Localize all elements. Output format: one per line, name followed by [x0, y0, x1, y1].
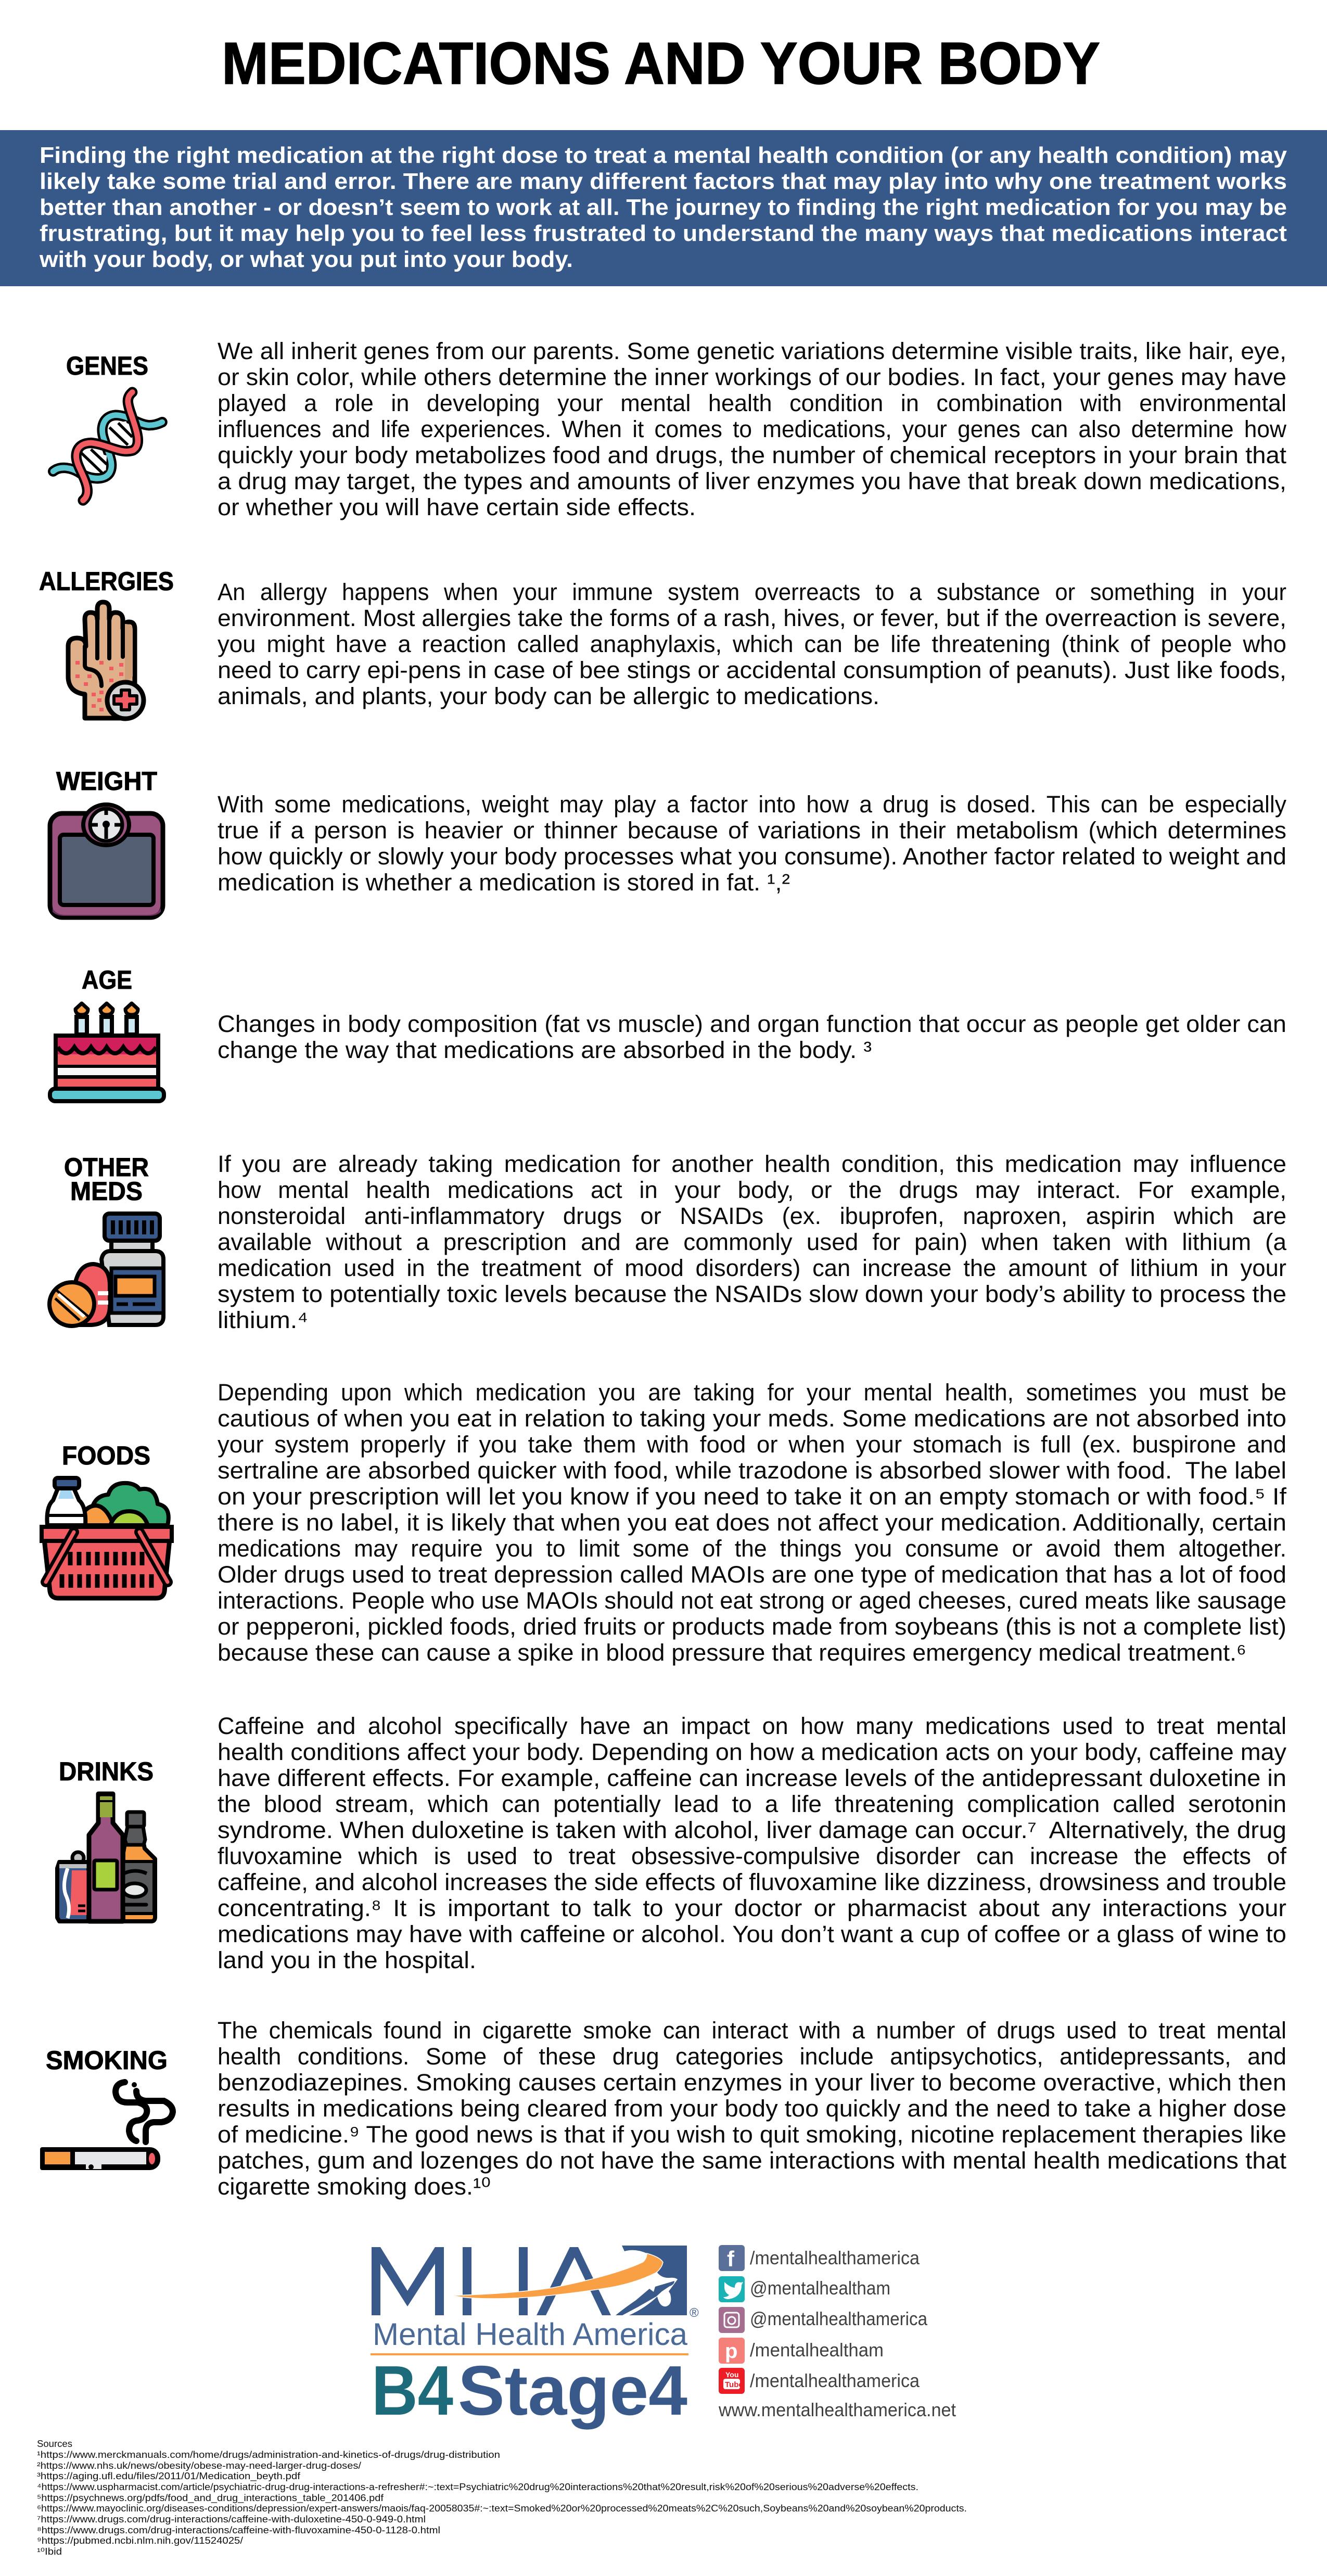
intro text: likely take some trial and error. There are many different factors that may play into why one treatment works: [40, 169, 1287, 194]
text: allergies: animals, and plants, your body can be allergic to medications.: [218, 683, 879, 709]
sources: Sources: [37, 2439, 72, 2449]
icon: bathroom scale: [50, 805, 163, 917]
icon: pill bottle and pills: [49, 1214, 163, 1326]
text: genes: played a role in developing your mental health condition in combination with environmental: [218, 390, 1286, 416]
text: genes: [218, 338, 1287, 520]
icon: instagram: [719, 2307, 745, 2333]
social handles: /mentalhealthamerica: [750, 2247, 920, 2268]
panel: foods: [42, 1379, 1287, 1666]
text: allergies: An allergy happens when your immune system overreacts to a substance or something in your: [218, 579, 1286, 605]
intro text: Finding the right medication at the right dose to treat a mental health condition (or any health condition) may: [40, 143, 1287, 168]
title: MEDICATIONS AND YOUR BODY: [222, 31, 1100, 97]
sources: ³https://aging.ufl.edu/files/2011/01/Medication_beyth.pdf: [37, 2471, 301, 2482]
social handles: /mentalhealtham: [750, 2339, 884, 2361]
icon: cigarette: [40, 2082, 173, 2170]
text: foods: cautious of when you eat in relation to taking your meds. Some medications are not absorbed into: [218, 1405, 1286, 1432]
panel: smoking: [40, 2017, 1287, 2200]
text: foods: medications may require you to limit some of the things you consume or avoid them altogether.: [218, 1535, 1286, 1562]
panel: other meds: [49, 1151, 1287, 1333]
intro text: [39, 143, 1287, 272]
icon: youtube: You: [725, 2370, 738, 2379]
intro text: better than another - or doesn’t seem to work at all. The journey to finding the right medication for you may be: [40, 195, 1287, 220]
text: allergies: need to carry epi-pens in case of bee stings or accidental consumption of peanuts). Just like foods,: [218, 657, 1286, 683]
panel: genes: [53, 338, 1287, 520]
social handles: @mentalhealtham: [750, 2277, 890, 2299]
logo: MHA B4Stage4: ®: [690, 2306, 699, 2320]
text: foods: [218, 1379, 1287, 1666]
text: weight: how quickly or slowly your body processes what you consume). Another factor related to weight and: [218, 843, 1286, 870]
text: genes: influences and life experiences. When it comes to medications, your genes can also determine how: [218, 416, 1286, 442]
text: allergies: [218, 579, 1286, 709]
text: other meds: system to potentially toxic levels because the NSAIDs slow down your body’s ability to process the: [218, 1281, 1286, 1307]
text: drinks: health conditions affect your body. Depending on how a medication acts on your body, caffeine may: [218, 1739, 1287, 1765]
text: smoking: [218, 2017, 1287, 2200]
text: foods: there is no label, it is likely that when you eat does not affect your medication. Additionally, certain: [218, 1509, 1286, 1536]
text: other meds: available without a prescription and are commonly used for pain) when taken with lithium (a: [218, 1229, 1287, 1255]
text: smoking: benzodiazepines. Smoking causes certain enzymes in your liver to become overactive, which then: [218, 2069, 1286, 2096]
sources: ⁸https://www.drugs.com/drug-interactions/caffeine-with-fluvoxamine-450-0-1128-0.html: [37, 2525, 440, 2535]
icon: DNA helix: [53, 392, 162, 501]
heading: foods: FOODS: [62, 1441, 150, 1470]
text: drinks: fluvoxamine which is used to treat obsessive-compulsive disorder can increase the effects of: [218, 1843, 1286, 1869]
intro text: frustrating, but it may help you to feel less frustrated to understand the many ways that medications interact: [40, 221, 1287, 246]
icon: birthday cake: [50, 1003, 164, 1101]
heading: age: AGE: [82, 965, 132, 994]
text: other meds: medication used in the treatment of mood disorders) can increase the amount of lithium in your: [218, 1255, 1286, 1281]
text: smoking: of medicine.⁹ The good news is that if you wish to quit smoking, nicotine replacement therapies like: [218, 2121, 1286, 2148]
text: foods: on your prescription will let you know if you need to take it on an empty stomach or with food.⁵ If: [218, 1483, 1287, 1510]
icon: facebook: f: [727, 2247, 735, 2271]
social handles: /mentalhealthamerica: [750, 2370, 920, 2391]
panel: intro banner: [0, 130, 1327, 286]
text: allergies: you might have a reaction called anaphylaxis, which can be life threatening (think of people who: [218, 631, 1286, 657]
text: smoking: results in medications being cleared from your body too quickly and the need to take a higher dose: [218, 2095, 1286, 2122]
heading: allergies: ALLERGIES: [39, 567, 174, 596]
text: drinks: the blood stream, which can potentially lead to a life threatening complication called serotonin: [218, 1791, 1286, 1817]
sources: ⁹https://pubmed.ncbi.nlm.nih.gov/11524025/: [37, 2535, 243, 2546]
text: weight: medication is whether a medication is stored in fat. ¹,²: [218, 869, 790, 896]
icon: youtube: [719, 2368, 745, 2394]
text: smoking: cigarette smoking does.¹⁰: [218, 2173, 491, 2200]
sources: ²https://www.nhs.uk/news/obesity/obese-may-need-larger-drug-doses/: [37, 2460, 361, 2471]
text: foods: sertraline are absorbed quicker with food, while trazodone is absorbed slower with food. The label: [218, 1457, 1286, 1484]
logo: MHA B4Stage4: B4: [372, 2351, 453, 2430]
sources: ⁵https://psychnews.org/pdfs/food_and_drug_interactions_table_201406.pdf: [37, 2493, 384, 2504]
text: weight: [218, 791, 1286, 896]
icon: pinterest: [719, 2338, 745, 2364]
text: foods: Depending upon which medication you are taking for your mental health, sometimes you must be: [218, 1379, 1286, 1406]
icon: food basket: [42, 1478, 172, 1598]
text: foods: Older drugs used to treat depression called MAOIs are one type of medication that has a lot of food: [218, 1561, 1286, 1588]
text: other meds: lithium.⁴: [218, 1307, 308, 1333]
social handles: www.mentalhealthamerica.net: [718, 2399, 956, 2420]
heading: genes: GENES: [66, 351, 148, 380]
intro text: with your body, or what you put into your body.: [39, 247, 573, 272]
text: drinks: concentrating.⁸ It is important to talk to your doctor or pharmacist about any interactions your: [218, 1895, 1286, 1921]
text: allergies: environment. Most allergies take the forms of a rash, hives, or fever, but if the overreaction is severe,: [218, 605, 1286, 631]
text: drinks: land you in the hospital.: [218, 1947, 476, 1973]
text: foods: because these can cause a spike in blood pressure that requires emergency medical treatment.⁶: [218, 1639, 1246, 1666]
logo: MHA B4Stage4: Mental Health America: [373, 2317, 688, 2352]
heading: smoking: SMOKING: [46, 2046, 168, 2075]
text: drinks: medications may have with caffeine or alcohol. You don’t want a cup of coffee or a glass of wine to: [218, 1921, 1286, 1947]
text: foods: or pepperoni, pickled foods, dried fruits or products made from soybeans (this is not a complete list): [218, 1613, 1286, 1640]
text: drinks: Caffeine and alcohol specifically have an impact on how many medications used to treat mental: [218, 1713, 1286, 1739]
icon: twitter: [719, 2276, 745, 2302]
text: genes: We all inherit genes from our parents. Some genetic variations determine visible traits, like hair, eye,: [218, 338, 1286, 364]
sources: ⁷https://www.drugs.com/drug-interactions/caffeine-with-duloxetine-450-0-949-0.html: [37, 2514, 426, 2524]
text: age: Changes in body composition (fat vs muscle) and organ function that occur as people get older can: [218, 1011, 1286, 1037]
text: other meds: If you are already taking medication for another health condition, this medication may influence: [218, 1151, 1286, 1177]
sources: [37, 2439, 967, 2557]
icon: hand with rash: [68, 602, 144, 719]
text: drinks: caffeine, and alcohol increases the side effects of fluvoxamine like dizziness, drowsiness and trouble: [218, 1869, 1286, 1895]
text: other meds: nonsteroidal anti-inflammatory drugs or NSAIDs (ex. ibuprofen, naproxen, aspirin which are: [218, 1203, 1286, 1229]
text: age: [218, 1011, 1286, 1063]
heading: other meds: MEDS: [70, 1177, 143, 1206]
text: drinks: [218, 1713, 1287, 1973]
logo: MHA B4Stage4: [371, 2246, 699, 2430]
heading: other meds: [64, 1153, 149, 1206]
text: other meds: [218, 1151, 1287, 1333]
social handles: @mentalhealthamerica: [750, 2308, 928, 2329]
icon: pinterest: p: [725, 2340, 737, 2363]
text: genes: quickly your body metabolizes food and drugs, the number of chemical receptors in your brain that: [218, 442, 1287, 468]
panel: allergies: [39, 567, 1286, 719]
text: genes: or skin color, while others determine the inner workings of our bodies. In fact, your genes may have: [218, 364, 1286, 390]
sources: ¹https://www.merckmanuals.com/home/drugs/administration-and-kinetics-of-drugs/drug-distribution: [37, 2450, 500, 2460]
text: smoking: patches, gum and lozenges do not have the same interactions with mental health medications that: [218, 2147, 1287, 2174]
text: other meds: how mental health medications act in your body, or the drugs may interact. For example,: [218, 1177, 1286, 1203]
heading: drinks: DRINKS: [59, 1757, 154, 1786]
text: weight: true if a person is heavier or thinner because of variations in their metabolism (which determines: [218, 817, 1286, 844]
icon: bottles and can: [57, 1794, 155, 1921]
text: age: change the way that medications are absorbed in the body. ³: [218, 1037, 872, 1063]
text: smoking: The chemicals found in cigarette smoke can interact with a number of drugs used to treat mental: [218, 2017, 1286, 2044]
sources: ⁶https://www.mayoclinic.org/diseases-conditions/depression/expert-answers/maois/faq-20058035#:~:text=Smoked%20or%20processed%20meats%2C%20such,Soybeans%20and%20soybean%20products.: [37, 2503, 967, 2514]
sources: ¹⁰Ibid: [37, 2546, 62, 2557]
text: foods: interactions. People who use MAOIs should not eat strong or aged cheeses, cured meats like sausage: [218, 1587, 1286, 1614]
sources: ⁴https://www.uspharmacist.com/article/psychiatric-drug-drug-interactions-a-refresher#:~:text=Psychiatric%20drug%20interactions%20that%20result,risk%20of%20serious%20adverse%20effects.: [37, 2482, 918, 2492]
text: smoking: health conditions. Some of these drug categories include antipsychotics, antidepressants, and: [218, 2043, 1286, 2070]
social handles: [718, 2247, 956, 2420]
social links: [718, 2245, 956, 2420]
text: genes: a drug may target, the types and amounts of liver enzymes you have that break down medications,: [218, 468, 1286, 494]
logo: MHA B4Stage4: Stage4: [458, 2351, 687, 2430]
heading: other meds: OTHER: [64, 1153, 149, 1182]
panel: weight: [50, 767, 1286, 917]
heading: weight: WEIGHT: [56, 767, 157, 796]
text: genes: or whether you will have certain side effects.: [218, 494, 696, 520]
icon: youtube: Tube: [725, 2380, 743, 2389]
panel: drinks: [57, 1713, 1287, 1973]
text: weight: With some medications, weight may play a factor into how a drug is dosed. This can be especially: [218, 791, 1286, 818]
text: drinks: have different effects. For example, caffeine can increase levels of the antidepressant duloxetine in: [218, 1765, 1286, 1791]
text: foods: your system properly if you take them with food or when your stomach is full (ex. buspirone and: [218, 1431, 1286, 1458]
panel: age: [50, 965, 1286, 1101]
text: drinks: syndrome. When duloxetine is taken with alcohol, liver damage can occur.⁷ Alternatively, the drug: [218, 1817, 1286, 1843]
icon: facebook: [719, 2245, 745, 2271]
